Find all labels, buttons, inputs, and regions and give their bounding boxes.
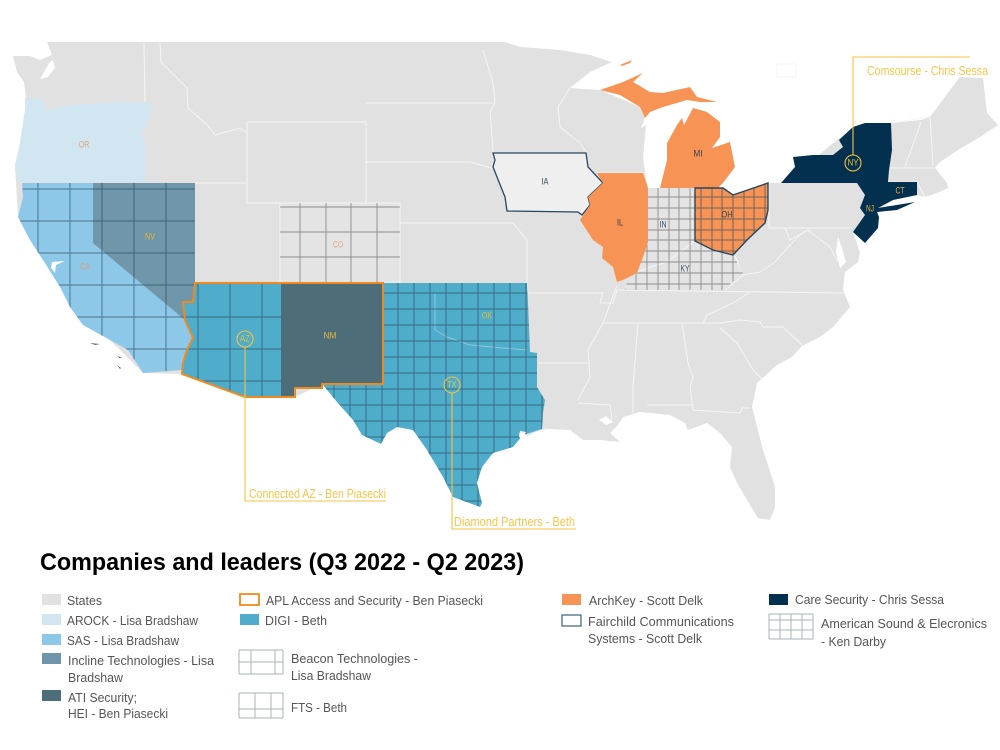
legend: Fairchild Communications: Systems - Scott Delk <box>588 632 703 646</box>
legend: States <box>42 594 102 608</box>
legend: ArchKey: ArchKey - Scott Delk <box>589 594 704 608</box>
legend: Beacon Technologies: Beacon Technologies - <box>291 652 418 666</box>
state labels: KY <box>680 264 690 274</box>
state labels: MI <box>694 148 702 160</box>
callout: Connected AZ: Connected AZ - Ben Piasecki <box>249 487 386 501</box>
Arizona grid <box>180 283 281 397</box>
state borders <box>144 43 935 420</box>
legend: Incline Technologies <box>42 653 214 685</box>
Texas and Oklahoma grid <box>320 283 550 510</box>
Channel Islands <box>90 343 122 369</box>
legend: Incline Technologies: Incline Technologies - Lisa <box>68 654 214 668</box>
legend <box>42 593 987 721</box>
Arizona and New Mexico outline <box>182 283 383 397</box>
Puget Sound, Chesapeake Bay and Lake Pontchartrain <box>40 60 846 425</box>
callout: Comsourse <box>845 57 988 171</box>
legend: ATI Security <box>42 690 168 721</box>
legend: Fairchild Communications: Fairchild Communications <box>588 615 734 629</box>
legend: SAS: SAS - Lisa Bradshaw <box>67 634 180 648</box>
Galveston Bay <box>519 431 526 440</box>
state labels: CA <box>80 262 90 272</box>
Illinois <box>580 173 648 282</box>
Oregon <box>15 98 153 182</box>
callout: Comsourse: NY <box>848 158 859 168</box>
state labels: IN <box>660 220 667 230</box>
legend: American Sound and Electronics <box>769 614 987 649</box>
state labels: OK <box>482 310 493 322</box>
callout: Diamond Partners <box>444 377 576 529</box>
Nevada <box>93 183 195 320</box>
legend: American Sound and Electronics: - Ken Darby <box>821 635 887 649</box>
legend: AROCK: AROCK - Lisa Bradshaw <box>67 614 199 628</box>
Michigan upper peninsula <box>600 73 717 118</box>
Isle Royale <box>620 60 632 66</box>
legend: FTS: FTS - Beth <box>291 701 347 715</box>
states base <box>13 42 998 520</box>
faint box <box>777 64 796 77</box>
California <box>18 183 195 373</box>
Ohio <box>693 183 770 258</box>
New York, Connecticut and New Jersey <box>781 123 917 243</box>
state labels: IL <box>617 218 623 228</box>
New Mexico <box>281 283 383 397</box>
legend: States: States <box>67 594 102 608</box>
callout: Connected AZ <box>237 331 386 501</box>
Oklahoma border <box>435 293 527 350</box>
state labels: CT <box>896 186 905 196</box>
Texas and Oklahoma <box>323 283 545 507</box>
legend: ATI Security: ATI Security; <box>68 691 137 705</box>
legend: American Sound and Electronics: American Sound & Elecronics <box>821 617 987 631</box>
state labels: OH <box>722 210 733 220</box>
Michigan lower peninsula <box>660 108 735 188</box>
state labels: NV <box>145 232 155 242</box>
US map <box>10 42 998 520</box>
legend: Care Security: Care Security - Chris Sessa <box>795 593 944 607</box>
legend: Beacon Technologies: Lisa Bradshaw <box>291 669 372 683</box>
state labels: IA <box>542 176 549 188</box>
legend: APL Access and Security: APL Access and Security - Ben Piasecki <box>266 594 483 608</box>
Colorado <box>280 203 400 283</box>
callout: Diamond Partners: Diamond Partners - Beth <box>454 515 575 529</box>
California and Nevada grid <box>20 183 195 372</box>
callout: Diamond Partners: TX <box>448 380 457 390</box>
state labels: OR <box>79 140 89 150</box>
Indiana and Kentucky grid <box>620 186 745 292</box>
callout: Connected AZ: AZ <box>240 334 250 344</box>
legend: Fairchild Communications <box>562 615 734 646</box>
legend: FTS <box>239 693 347 718</box>
state labels: NJ <box>866 204 874 214</box>
title: Companies and leaders (Q3 2022 - Q2 2023) <box>40 549 524 576</box>
San Francisco Bay <box>51 261 65 273</box>
state labels: NM <box>324 330 337 342</box>
state labels <box>79 140 905 342</box>
legend: Beacon Technologies <box>239 650 418 683</box>
state labels: CO <box>333 240 343 250</box>
legend: ATI Security: HEI - Ben Piasecki <box>68 707 168 721</box>
legend: Incline Technologies: Bradshaw <box>68 671 124 685</box>
Iowa <box>493 153 603 215</box>
Arizona <box>182 283 281 397</box>
legend: DIGI: DIGI - Beth <box>265 614 327 628</box>
